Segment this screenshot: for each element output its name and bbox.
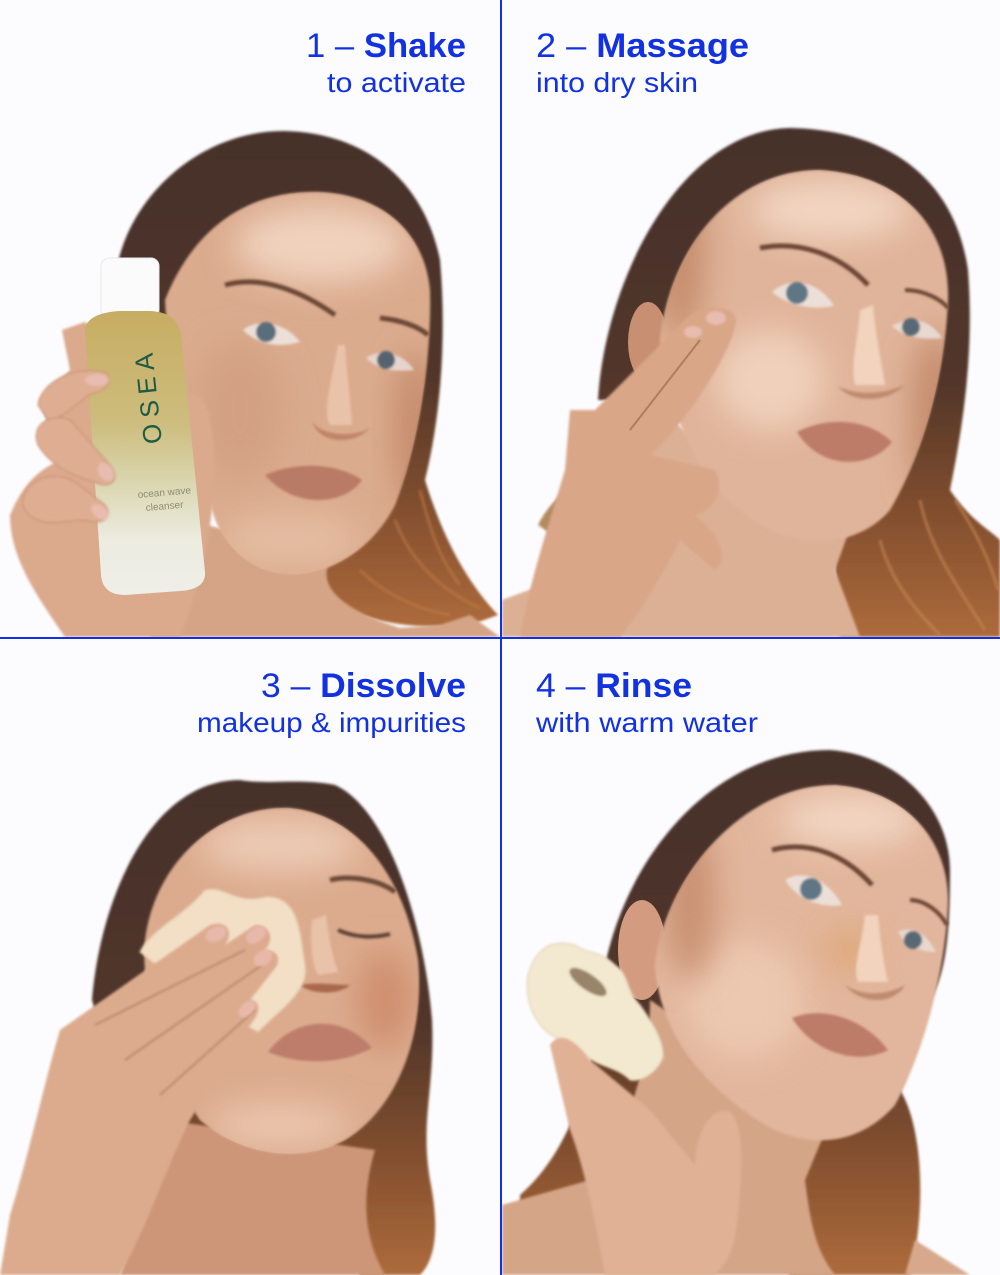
facial features: step 3 bbox=[268, 878, 395, 1061]
bottle brand: OSEA bbox=[129, 351, 168, 446]
finger crease: step 2 bbox=[630, 340, 700, 430]
heading: step 2 bbox=[536, 27, 749, 98]
ear: step 4 bbox=[618, 900, 666, 1000]
hair: step 2 bbox=[598, 128, 1000, 637]
face shading: step 4 bbox=[665, 794, 920, 1060]
neck: step 3 bbox=[120, 1120, 385, 1275]
heading: step 3 bbox=[197, 667, 466, 738]
bottle body bbox=[85, 311, 205, 595]
heading: step 4: 4 – Rinse bbox=[536, 667, 692, 705]
panel: step 4 rinse bbox=[502, 750, 970, 1275]
bottle: ocean wave cleanser bbox=[85, 258, 205, 595]
hair strands: step 2 bbox=[880, 500, 998, 635]
fingers: step 1 bbox=[34, 370, 116, 524]
bottle cap bbox=[101, 258, 159, 318]
hair: step 3 bbox=[92, 780, 435, 1275]
ear: step 2 bbox=[628, 302, 664, 372]
hair: step 1 bbox=[118, 131, 498, 627]
hand: step 4 bbox=[550, 1038, 741, 1275]
heading: step 3: 3 – Dissolve bbox=[261, 667, 466, 705]
face shading: step 3 bbox=[200, 817, 413, 1147]
facial features: step 2 bbox=[760, 246, 948, 462]
heading: step 3: makeup & impurities bbox=[197, 707, 466, 738]
cotton pad: step 3 bbox=[140, 889, 306, 1032]
finger creases: step 3 bbox=[95, 950, 262, 1095]
heading: step 1: 1 – Shake bbox=[306, 27, 466, 65]
facial features: step 1 bbox=[225, 282, 428, 500]
bottle: ocean wave cleanser: cleanser bbox=[145, 500, 185, 514]
panel: step 3 dissolve bbox=[0, 780, 435, 1275]
face: step 3 bbox=[144, 808, 419, 1154]
stray hair left: step 2 bbox=[536, 496, 558, 532]
neck and chest: step 2 bbox=[502, 424, 861, 637]
heading: step 1: to activate bbox=[327, 67, 466, 98]
hand: step 2 bbox=[520, 308, 736, 637]
hand: step 1 bbox=[10, 322, 214, 637]
fingernails: step 2 bbox=[684, 311, 726, 338]
face: step 4 bbox=[655, 785, 948, 1140]
hair: step 4 bbox=[520, 750, 950, 1275]
heading: step 1 bbox=[306, 27, 466, 98]
fingernails: step 3 bbox=[205, 926, 272, 1018]
hand: step 3 bbox=[0, 924, 278, 1275]
face shading: step 2 bbox=[662, 170, 945, 480]
face: step 2 bbox=[660, 170, 948, 541]
heading: step 4 bbox=[535, 667, 758, 738]
heading: step 4: with warm water bbox=[535, 707, 758, 738]
neck and shoulders: step 4 bbox=[502, 1000, 835, 1275]
panel: step 2 massage bbox=[502, 128, 1000, 637]
face shading: step 1 bbox=[195, 207, 435, 566]
facial features: step 4 bbox=[772, 847, 947, 1057]
panel: step 1 shake bbox=[10, 131, 500, 637]
heading: step 2: 2 – Massage bbox=[536, 27, 749, 65]
heading: step 2: into dry skin bbox=[536, 67, 698, 98]
neck and shoulder: step 1 bbox=[150, 520, 500, 637]
bottle product name: ocean wave bbox=[137, 485, 192, 501]
cotton pad: step 4 bbox=[527, 943, 663, 1080]
face: step 1 bbox=[165, 192, 430, 574]
makeup smudge on pad bbox=[565, 963, 611, 1001]
hair strands: step 1 bbox=[360, 490, 480, 615]
